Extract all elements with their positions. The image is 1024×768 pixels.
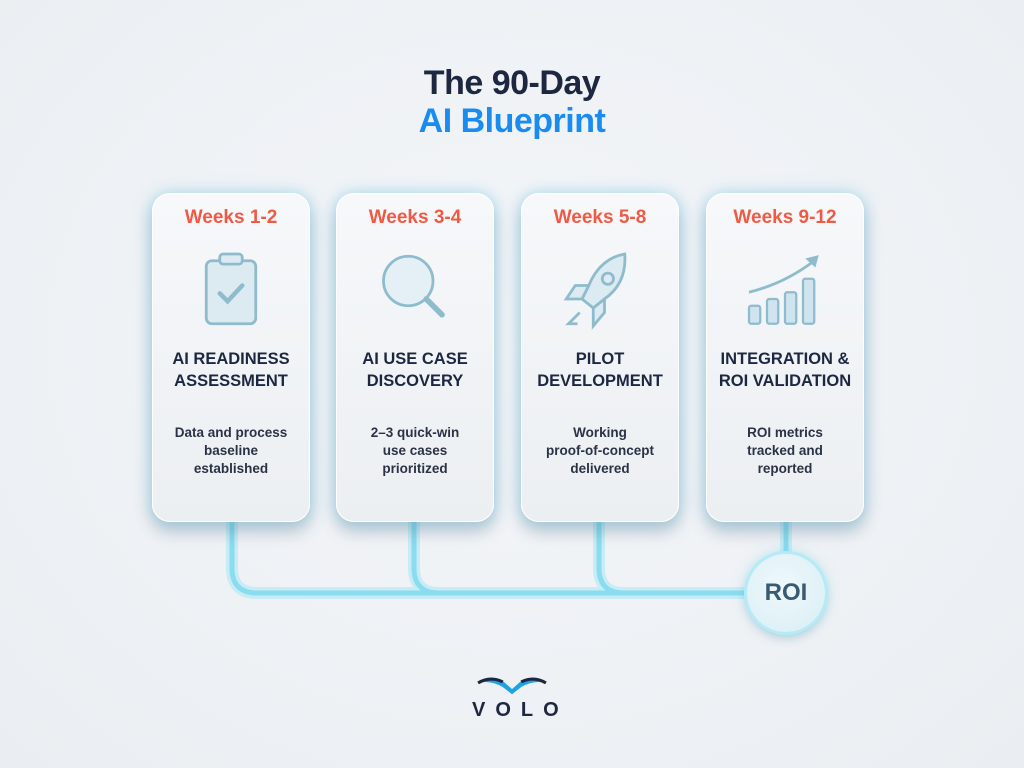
panel: weeks 9-12: ROI VALIDATION [719,372,851,390]
panel: weeks 5-8: Weeks 5-8 [554,207,646,228]
icon: clipboard [204,252,258,326]
panel: weeks 1-2: Weeks 1-2 [185,207,277,228]
panel: weeks 3-4: Weeks 3-4 [369,207,461,228]
panel: weeks 5-8: DEVELOPMENT [537,372,663,390]
panel: weeks 1-2: Data and process [175,425,287,440]
icon: growth chart [748,255,819,325]
title [419,64,606,140]
panel: weeks 3-4 [336,193,494,522]
panel: weeks 5-8: Working [573,425,627,440]
logo: volo [472,678,569,721]
panel: weeks 9-12: ROI metrics [747,425,823,440]
panel: weeks 1-2: established [194,461,268,476]
panel: weeks 3-4: use cases [383,443,447,458]
panel: weeks 5-8: delivered [570,461,630,476]
panel: weeks 3-4: 2–3 quick-win [371,425,459,440]
panel: weeks 1-2 [152,193,310,522]
panel: weeks 1-2: ASSESSMENT [174,372,288,390]
panel: weeks 3-4: DISCOVERY [367,372,463,390]
panel: weeks 5-8: proof-of-concept [546,443,654,458]
panel: weeks 1-2: baseline [204,443,258,458]
title: AI Blueprint [419,102,605,140]
panel: weeks 9-12: reported [758,461,812,476]
panel: weeks 3-4: prioritized [382,461,448,476]
title: The 90-Day [424,64,600,102]
panel: weeks 9-12: INTEGRATION & [721,350,849,368]
panel: weeks 1-2: AI READINESS [172,350,290,368]
panel: weeks 5-8 [521,193,679,522]
ROI circle: ROI [765,579,807,606]
panel: weeks 9-12: tracked and [747,443,823,458]
panel: weeks 9-12 [706,193,864,522]
icon: rocket [564,252,626,330]
panel: weeks 3-4: AI USE CASE [362,350,468,368]
panel: weeks 5-8: PILOT [576,350,624,368]
icon: magnifier [382,254,445,318]
ROI circle [747,554,825,632]
panel: weeks 9-12: Weeks 9-12 [733,207,837,228]
logo: volo: VOLO [472,699,569,721]
